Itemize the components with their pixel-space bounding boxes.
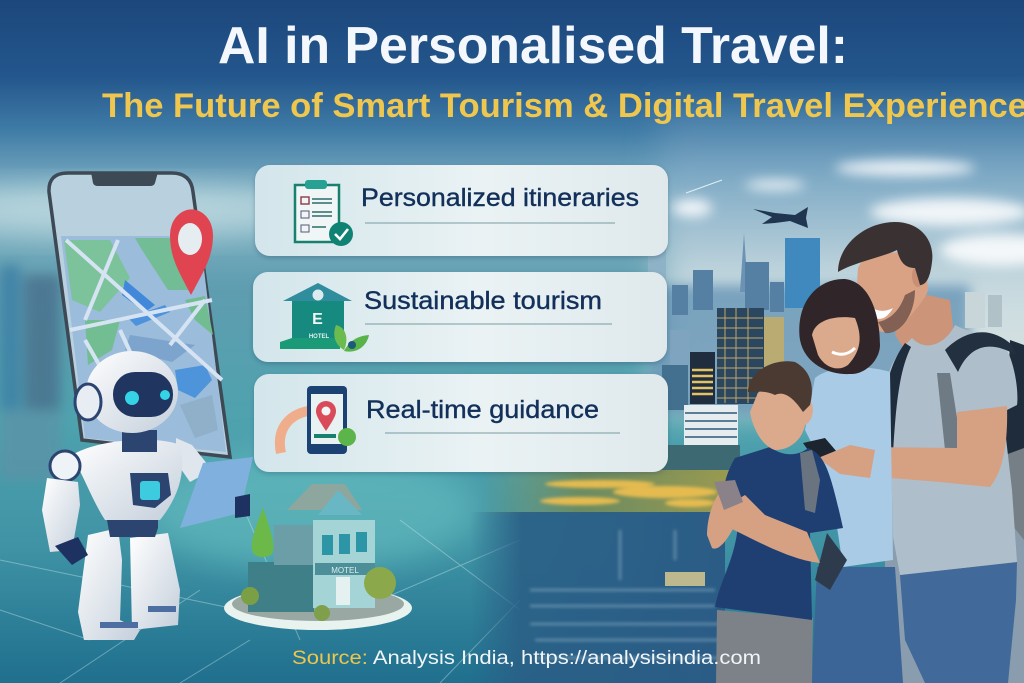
family: [707, 222, 1024, 683]
panel: personalized itineraries: [255, 165, 668, 258]
route line: [686, 180, 722, 193]
phone with map: [49, 172, 230, 457]
boy: [707, 361, 847, 683]
head: [86, 351, 178, 433]
title: AI in Personalised Travel:: [218, 17, 848, 75]
icon: hotel: [280, 283, 369, 352]
label: Sustainable tourism: [364, 287, 602, 315]
panel: sustainable tourism: [253, 272, 667, 364]
woman: [799, 279, 903, 683]
label: Real-time guidance: [366, 396, 599, 424]
man's phone and hand: [803, 438, 875, 478]
back leg: [130, 533, 180, 630]
source line: Source: Analysis India, https://analysisindia.com: [292, 648, 761, 669]
front leg: [78, 528, 140, 640]
hotel building: MOTEL: [331, 566, 359, 575]
man: [830, 222, 1024, 683]
icon: hotel: HOTEL: [309, 334, 329, 340]
panel: real-time guidance: [254, 374, 668, 474]
subtitle: The Future of Smart Tourism & Digital Travel Experience: [102, 87, 1024, 125]
robot: [42, 351, 253, 640]
icon: map pin: [170, 209, 213, 295]
icon: checklist: [295, 180, 353, 246]
right arm: [176, 438, 212, 482]
backpack: [1005, 340, 1024, 460]
straps: [945, 332, 1016, 372]
tablet: [180, 457, 253, 528]
label: Personalized itineraries: [361, 184, 639, 212]
icon: phone with pin: [280, 386, 356, 454]
torso: [72, 440, 182, 520]
airplane: [753, 207, 808, 228]
icon: hotel: E: [312, 311, 323, 328]
city skyline: [470, 180, 1024, 683]
hotel building: [224, 484, 412, 630]
